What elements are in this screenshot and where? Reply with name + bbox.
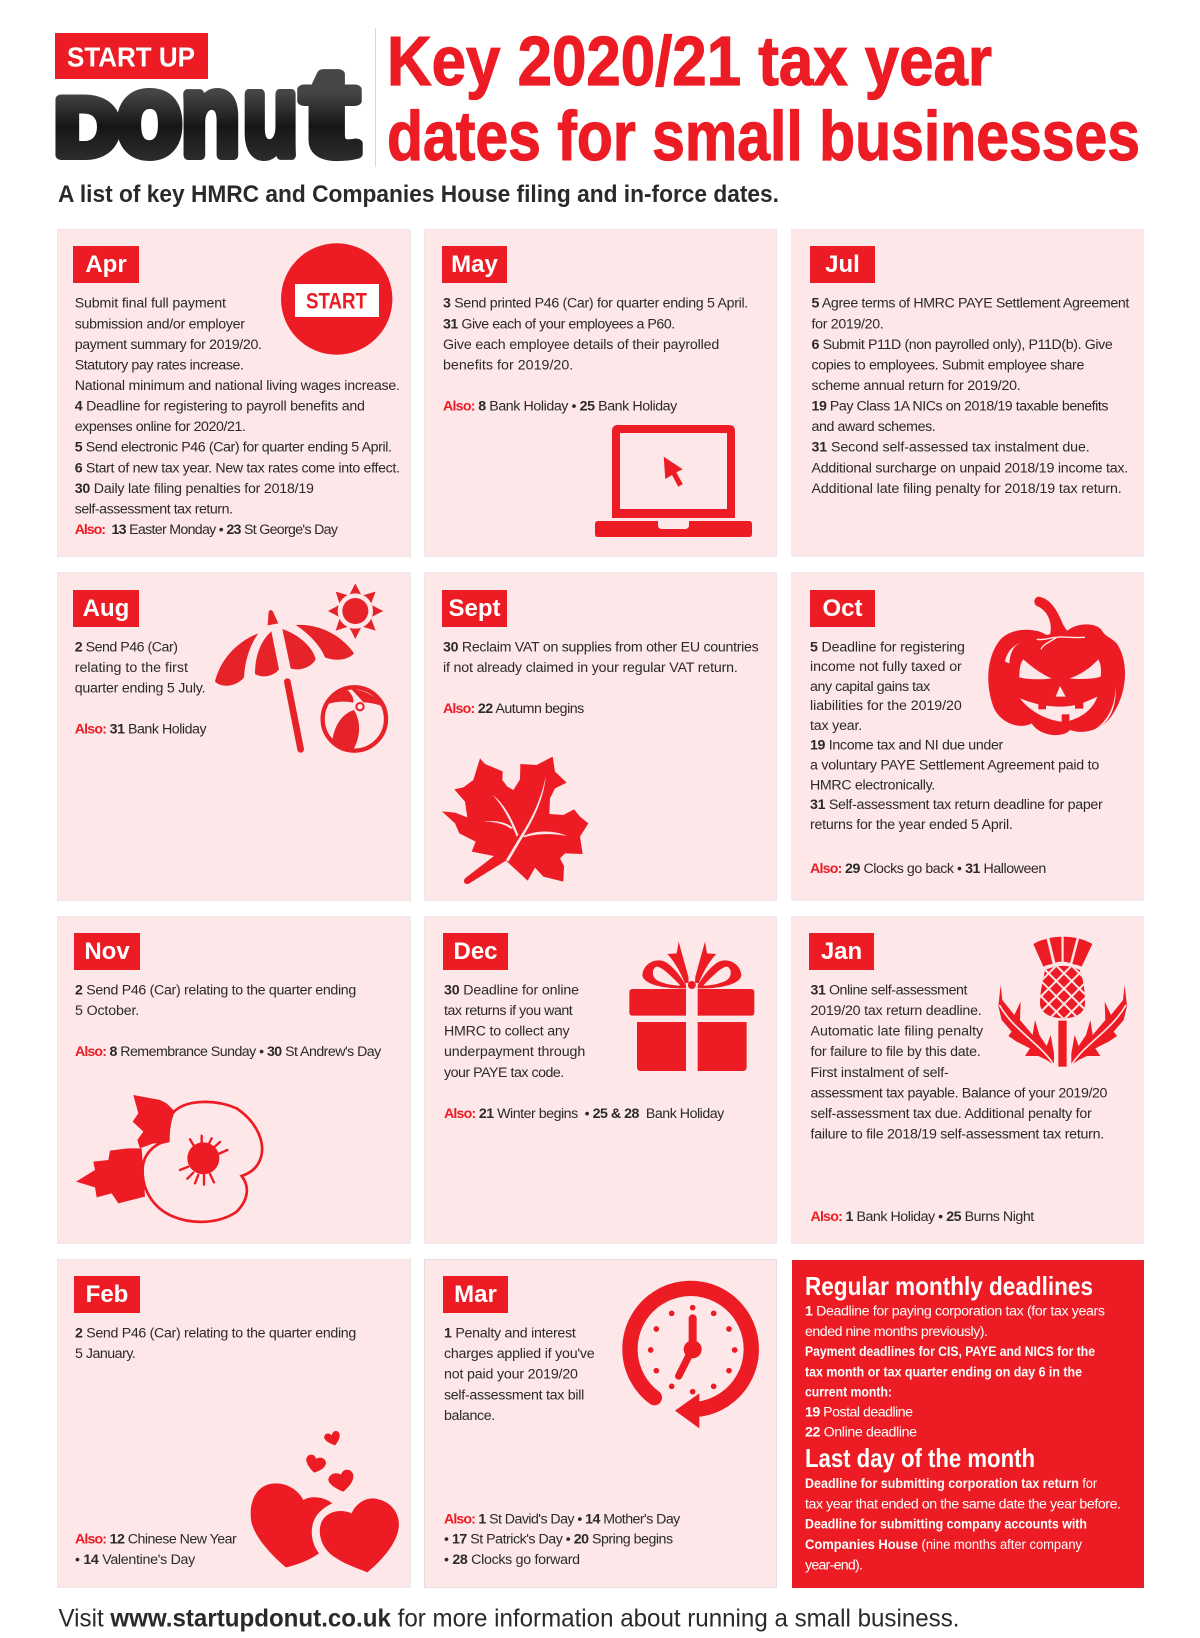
icon: start button bbox=[281, 243, 392, 355]
text: February dates: 2 Send P46 (Car) relating to the quarter ending bbox=[75, 1326, 356, 1342]
text: August dates: quarter ending 5 July. bbox=[75, 680, 205, 696]
panel: September bbox=[424, 572, 776, 900]
logo: Start Up Donut: o bbox=[117, 52, 182, 180]
text: December dates: HMRC to collect any bbox=[444, 1024, 571, 1040]
panel: April bbox=[58, 230, 410, 556]
icon: thistle bbox=[998, 936, 1127, 1067]
text: December dates bbox=[444, 982, 725, 1122]
text: March dates: • 17 St Patrick's Day • 20 Spring begins bbox=[444, 1531, 673, 1547]
text: July dates: copies to employees. Submit employee share bbox=[812, 357, 1084, 373]
text: October dates: 5 Deadline for registering bbox=[810, 639, 965, 655]
text: monthly deadlines: 22 Online deadline bbox=[805, 1425, 917, 1441]
text: July dates: 31 Second self-assessed tax instalment due. bbox=[812, 440, 1090, 456]
text: September dates: Also: 22 Autumn begins bbox=[443, 701, 584, 717]
title: Key 2020/21 tax year bbox=[387, 22, 992, 100]
panel: November bbox=[58, 916, 410, 1244]
heading: last day of the month: Last day of the month bbox=[805, 1443, 1035, 1473]
footer: Visit www.startupdonut.co.uk for more information about running a small business. bbox=[58, 1605, 960, 1633]
logo: Start Up Donut: n bbox=[181, 52, 240, 180]
text: October dates: any capital gains tax bbox=[810, 679, 930, 695]
text: last day deadlines: Deadline for submitting corporation tax return for bbox=[805, 1476, 1097, 1492]
text: March dates: Also: 1 St David's Day • 14 Mother's Day bbox=[444, 1512, 681, 1528]
month label: Jan bbox=[809, 933, 874, 970]
text: last day deadlines: Deadline for submitting company accounts with bbox=[805, 1517, 1087, 1533]
text: May dates: Give each employee details of their payrolled bbox=[443, 337, 719, 353]
text: August dates: 2 Send P46 (Car) bbox=[75, 639, 178, 655]
icon: gift bbox=[629, 942, 754, 1071]
text: October dates bbox=[810, 639, 1103, 877]
text: November dates: Also: 8 Remembrance Sunday • 30 St Andrew's Day bbox=[75, 1044, 382, 1060]
text: October dates: income not fully taxed or bbox=[810, 659, 962, 675]
text: December dates: 30 Deadline for online bbox=[444, 982, 579, 998]
logo: Start Up Donut: t bbox=[302, 44, 358, 182]
panel: October bbox=[792, 572, 1144, 900]
icon: clock bbox=[630, 1288, 751, 1428]
text: July dates: Additional late filing penalty for 2018/19 tax return. bbox=[812, 481, 1122, 497]
text: September dates: 30 Reclaim VAT on supplies from other EU countries bbox=[443, 639, 759, 655]
icon: laptop bbox=[595, 425, 752, 537]
logo: Start Up Donut bbox=[55, 33, 358, 182]
text: July dates: 5 Agree terms of HMRC PAYE Settlement Agreement bbox=[812, 296, 1129, 312]
text: November dates: 2 Send P46 (Car) relating to the quarter ending bbox=[75, 982, 356, 998]
text: September dates bbox=[443, 639, 759, 717]
text: March dates: charges applied if you've bbox=[444, 1346, 595, 1362]
logo: Start Up Donut: D bbox=[55, 83, 119, 173]
text: October dates: Also: 29 Clocks go back • 31 Halloween bbox=[810, 861, 1046, 877]
month label: Nov: Nov bbox=[84, 938, 130, 965]
text: December dates: Also: 21 Winter begins • 25 & 28 Bank Holiday bbox=[444, 1106, 725, 1122]
logo: Start Up Donut: u bbox=[243, 52, 298, 180]
text: May dates: 31 Give each of your employees a P60. bbox=[443, 316, 675, 332]
text: January dates: 31 Online self-assessment bbox=[810, 982, 967, 998]
month label: Mar: Mar bbox=[454, 1281, 497, 1308]
text: October dates: HMRC electronically. bbox=[810, 777, 935, 793]
text: May dates: Also: 8 Bank Holiday • 25 Bank Holiday bbox=[443, 399, 678, 415]
month label: Oct bbox=[810, 590, 875, 627]
text: April dates: 30 Daily late filing penalties for 2018/19 bbox=[75, 481, 314, 497]
month label: May: May bbox=[451, 251, 498, 278]
panel: regular monthly deadlines bbox=[792, 1260, 1144, 1588]
month label: Apr bbox=[73, 246, 139, 283]
text: February dates: • 14 Valentine's Day bbox=[75, 1552, 196, 1568]
text: March dates: not paid your 2019/20 bbox=[444, 1367, 578, 1383]
text: August dates: Also: 31 Bank Holiday bbox=[75, 722, 207, 738]
month label: Jul: Jul bbox=[825, 251, 860, 278]
text: March dates bbox=[444, 1326, 681, 1568]
text: April dates: payment summary for 2019/20. bbox=[75, 337, 262, 353]
text: October dates: a voluntary PAYE Settlement Agreement paid to bbox=[810, 757, 1099, 773]
text: January dates: Automatic late filing penalty bbox=[810, 1024, 984, 1040]
text: July dates: for 2019/20. bbox=[812, 316, 884, 332]
text: July dates: Additional surcharge on unpaid 2018/19 income tax. bbox=[812, 460, 1128, 476]
text: monthly deadlines: current month: bbox=[805, 1385, 892, 1401]
panel: July bbox=[792, 230, 1144, 556]
icon: maple leaf bbox=[442, 757, 588, 884]
text: December dates: underpayment through bbox=[444, 1044, 585, 1060]
icon: hearts bbox=[251, 1431, 399, 1572]
text: May dates bbox=[443, 296, 748, 415]
text: April dates bbox=[75, 296, 400, 538]
month label: Aug: Aug bbox=[83, 595, 129, 622]
text: December dates: tax returns if you want bbox=[444, 1003, 573, 1019]
text: monthly deadlines: 19 Postal deadline bbox=[805, 1404, 913, 1420]
text: October dates: 31 Self-assessment tax return deadline for paper bbox=[810, 797, 1103, 813]
text: last day deadlines: Companies House (nine months after company bbox=[805, 1537, 1083, 1553]
month label: Jul bbox=[810, 246, 875, 283]
text: April dates: 4 Deadline for registering to payroll benefits and bbox=[75, 399, 365, 415]
month label: Sept bbox=[442, 590, 507, 627]
text: monthly deadlines: ended nine months previously). bbox=[805, 1324, 988, 1340]
month label: Jan: Jan bbox=[821, 938, 862, 965]
month label: Sept: Sept bbox=[448, 595, 501, 622]
text: April dates: expenses online for 2020/21. bbox=[75, 419, 246, 435]
panel: February bbox=[58, 1260, 410, 1588]
text: December dates: your PAYE tax code. bbox=[444, 1065, 564, 1081]
text: October dates: returns for the year ended 5 April. bbox=[810, 817, 1013, 833]
text: March dates: 1 Penalty and interest bbox=[444, 1326, 576, 1342]
text: January dates: self-assessment tax due. Additional penalty for bbox=[810, 1106, 1092, 1122]
month label: Mar bbox=[443, 1276, 508, 1313]
month label: Apr: Apr bbox=[85, 251, 127, 278]
text: last day deadlines: year-end). bbox=[805, 1557, 863, 1573]
text: last day deadlines bbox=[805, 1476, 1121, 1573]
text: April dates: Submit final full payment bbox=[75, 296, 226, 312]
month label: Aug bbox=[73, 590, 139, 627]
text: July dates: 6 Submit P11D (non payrolled only), P11D(b). Give bbox=[812, 337, 1113, 353]
text: July dates: and award schemes. bbox=[812, 419, 936, 435]
text: January dates: assessment tax payable. Balance of your 2019/20 bbox=[810, 1085, 1108, 1101]
text: November dates bbox=[75, 982, 382, 1060]
month label: Oct: Oct bbox=[822, 595, 863, 622]
text: October dates: tax year. bbox=[810, 718, 862, 734]
text: January dates: First instalment of self- bbox=[810, 1065, 949, 1081]
text: July dates: 19 Pay Class 1A NICs on 2018/19 taxable benefits bbox=[812, 399, 1108, 415]
text: February dates: 5 January. bbox=[75, 1346, 136, 1362]
panel: January bbox=[792, 909, 1144, 1244]
text: September dates: if not already claimed in your regular VAT return. bbox=[443, 660, 738, 676]
text: May dates: 3 Send printed P46 (Car) for quarter ending 5 April. bbox=[443, 296, 748, 312]
text: monthly deadlines bbox=[805, 1304, 1105, 1441]
text: April dates: 6 Start of new tax year. New tax rates come into effect. bbox=[75, 460, 400, 476]
icon: pumpkin bbox=[988, 597, 1125, 735]
month label: Feb bbox=[74, 1276, 140, 1313]
text: January dates bbox=[810, 982, 1108, 1225]
subtitle: A list of key HMRC and Companies House filing and in-force dates. bbox=[58, 181, 779, 208]
text: May dates: benefits for 2019/20. bbox=[443, 357, 573, 373]
panel: August bbox=[58, 572, 410, 900]
text: October dates: liabilities for the 2019/20 bbox=[810, 698, 962, 714]
month label: Feb: Feb bbox=[86, 1281, 128, 1308]
text: March dates: self-assessment tax bill bbox=[444, 1387, 584, 1403]
text: October dates: 19 Income tax and NI due under bbox=[810, 738, 1004, 754]
text: January dates: failure to file 2018/19 self-assessment tax return. bbox=[810, 1126, 1104, 1142]
text: April dates: 5 Send electronic P46 (Car) for quarter ending 5 April. bbox=[75, 440, 392, 456]
text: April dates: self-assessment tax return. bbox=[75, 501, 233, 517]
text: April dates: submission and/or employer bbox=[75, 316, 245, 332]
text: last day deadlines: tax year that ended on the same date the year before. bbox=[805, 1496, 1121, 1512]
text: January dates: 2019/20 tax return deadline. bbox=[810, 1003, 982, 1019]
month label: Nov bbox=[74, 933, 140, 970]
icon: start button: START bbox=[306, 288, 367, 313]
title bbox=[387, 22, 1140, 175]
panel: March bbox=[424, 1260, 776, 1588]
month label: Dec: Dec bbox=[453, 938, 498, 965]
text: March dates: balance. bbox=[444, 1408, 495, 1424]
panel: May bbox=[424, 230, 776, 556]
panel: December bbox=[424, 916, 776, 1244]
text: monthly deadlines: Payment deadlines for CIS, PAYE and NICS for the bbox=[805, 1344, 1095, 1360]
text: August dates bbox=[75, 639, 207, 738]
text: February dates: Also: 12 Chinese New Year bbox=[75, 1531, 237, 1547]
icon: beach umbrella, sun and ball bbox=[215, 583, 386, 751]
month label: Dec bbox=[443, 933, 508, 970]
text: January dates: for failure to file by this date. bbox=[810, 1044, 980, 1060]
text: February dates bbox=[75, 1326, 356, 1568]
text: April dates: Statutory pay rates increase. bbox=[75, 357, 244, 373]
text: monthly deadlines: tax month or tax quarter ending on day 6 in the bbox=[805, 1364, 1082, 1380]
text: monthly deadlines: 1 Deadline for paying corporation tax (for tax years bbox=[805, 1304, 1105, 1320]
text: March dates: • 28 Clocks go forward bbox=[444, 1552, 580, 1568]
heading: regular monthly deadlines: Regular monthly deadlines bbox=[805, 1271, 1093, 1301]
text: April dates: Also: 13 Easter Monday • 23 St George's Day bbox=[75, 522, 339, 538]
text: January dates: Also: 1 Bank Holiday • 25 Burns Night bbox=[810, 1209, 1034, 1225]
month label: May bbox=[442, 246, 507, 283]
text: July dates bbox=[812, 296, 1129, 497]
icon: poppy bbox=[76, 1095, 262, 1222]
text: November dates: 5 October. bbox=[75, 1003, 139, 1019]
text: April dates: National minimum and national living wages increase. bbox=[75, 378, 400, 394]
text: July dates: scheme annual return for 2019/20. bbox=[812, 378, 1020, 394]
text: August dates: relating to the first bbox=[75, 660, 188, 676]
logo: Start Up Donut: START UP bbox=[67, 42, 195, 72]
